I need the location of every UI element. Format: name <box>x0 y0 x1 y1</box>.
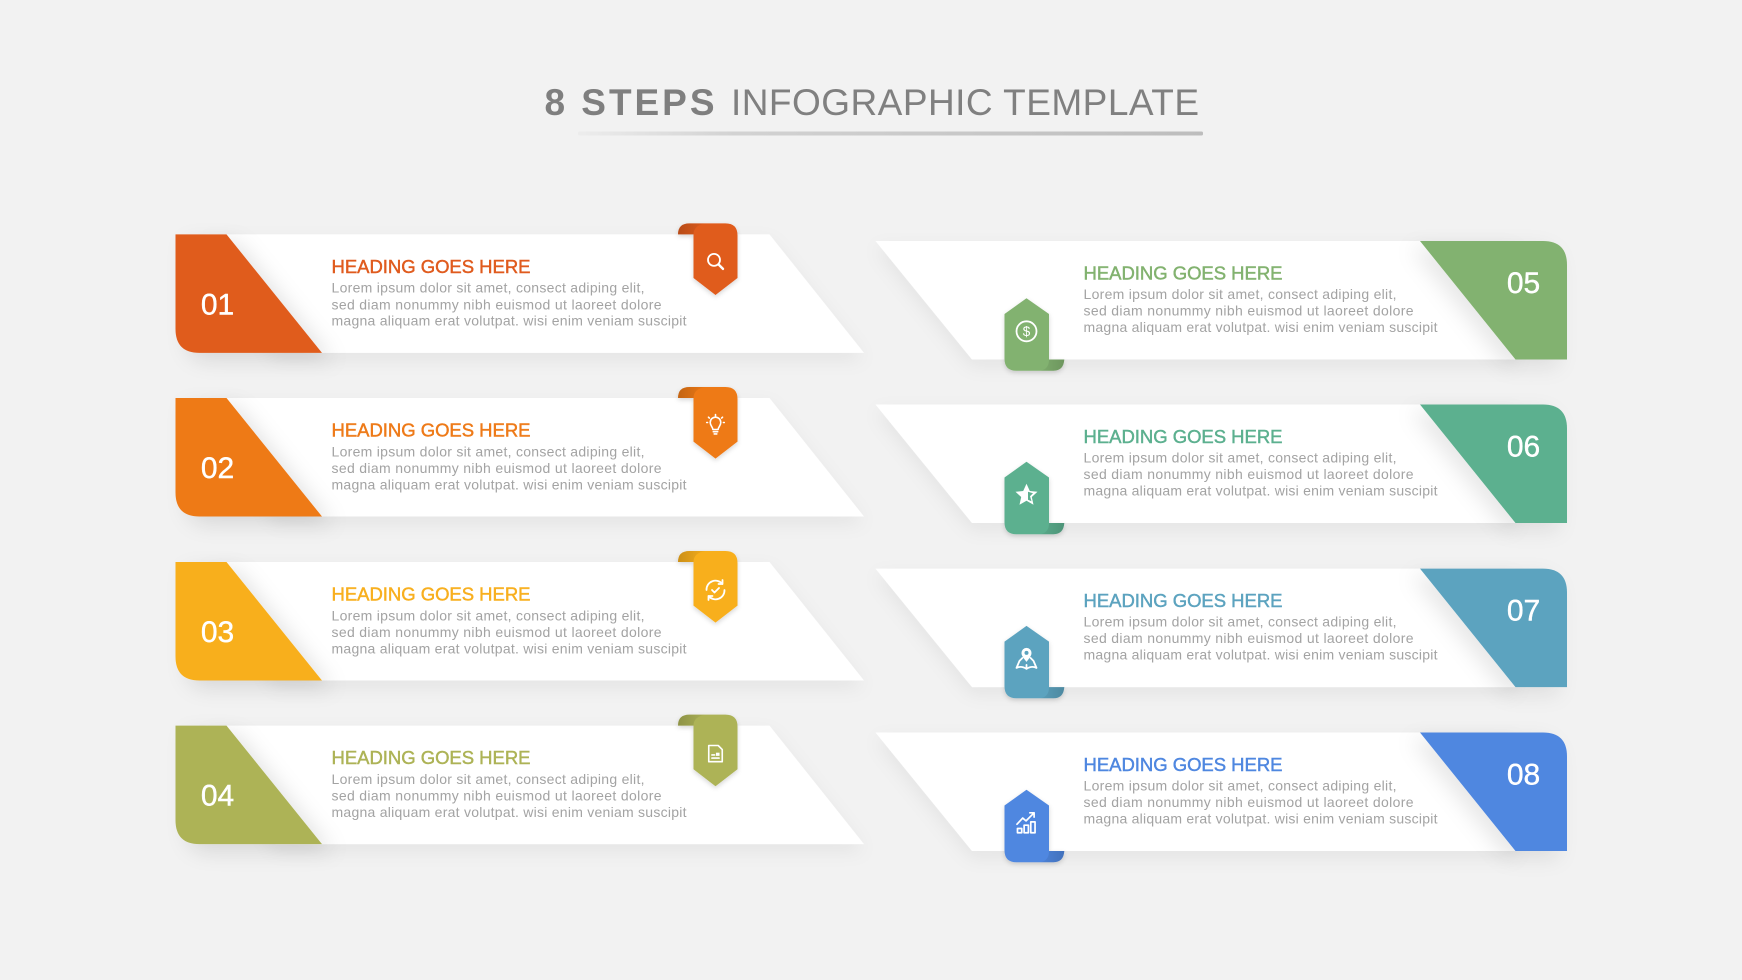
icon: dollar coin <box>1016 321 1036 341</box>
step 02 panel <box>176 387 864 516</box>
band <box>876 569 1516 687</box>
body text <box>332 443 687 492</box>
body text: sed diam nonummy nibh euismod ut laoreet dolore <box>1084 794 1414 810</box>
ribbon <box>1004 462 1064 534</box>
icon: refresh check <box>706 580 725 600</box>
icon: document <box>709 746 722 762</box>
icon: magnifier <box>708 254 723 269</box>
band <box>876 404 1516 523</box>
body text: magna aliquam erat volutpat. wisi enim veniam suscipit <box>1084 647 1438 663</box>
heading: HEADING GOES HERE <box>1084 262 1282 284</box>
band <box>876 241 1516 360</box>
body text: magna aliquam erat volutpat. wisi enim veniam suscipit <box>332 476 687 492</box>
body text: sed diam nonummy nibh euismod ut laoreet dolore <box>332 460 662 476</box>
number: 05 <box>1507 267 1540 300</box>
ribbon <box>678 387 738 459</box>
body text: magna aliquam erat volutpat. wisi enim veniam suscipit <box>1084 810 1438 826</box>
body text: Lorem ipsum dolor sit amet, consect adiping elit, <box>332 443 644 459</box>
heading: HEADING GOES HERE <box>332 256 530 277</box>
heading: HEADING GOES HERE <box>1084 590 1282 611</box>
number tab <box>176 562 322 680</box>
body text <box>1084 614 1438 663</box>
step 04 panel <box>176 715 864 844</box>
number: 02 <box>201 452 234 485</box>
body text <box>332 280 687 329</box>
step 01 panel <box>176 223 864 353</box>
number tab <box>176 234 322 353</box>
body text: Lorem ipsum dolor sit amet, consect adiping elit, <box>1084 286 1396 302</box>
number tab <box>176 398 322 516</box>
number: 03 <box>201 616 234 649</box>
title: 8 STEPS <box>544 82 714 123</box>
number: 08 <box>1507 758 1540 792</box>
body text: Lorem ipsum dolor sit amet, consect adiping elit, <box>1084 778 1396 794</box>
number: 07 <box>1507 595 1540 628</box>
body text: sed diam nonummy nibh euismod ut laoreet dolore <box>1084 302 1414 318</box>
number: 06 <box>1507 430 1540 464</box>
number tab <box>176 726 322 844</box>
body text: magna aliquam erat volutpat. wisi enim veniam suscipit <box>1084 319 1438 335</box>
body text: Lorem ipsum dolor sit amet, consect adiping elit, <box>1084 614 1396 630</box>
body text: sed diam nonummy nibh euismod ut laoreet dolore <box>332 624 662 640</box>
body text: Lorem ipsum dolor sit amet, consect adiping elit, <box>1084 450 1396 466</box>
ribbon <box>678 551 738 623</box>
step 08 panel <box>876 732 1567 862</box>
body text: magna aliquam erat volutpat. wisi enim veniam suscipit <box>332 804 687 820</box>
body text: sed diam nonummy nibh euismod ut laoreet dolore <box>332 788 662 804</box>
body text: sed diam nonummy nibh euismod ut laoreet dolore <box>332 296 662 312</box>
heading: HEADING GOES HERE <box>1084 754 1282 775</box>
title underline <box>578 132 1203 136</box>
heading: HEADING GOES HERE <box>1084 426 1282 447</box>
number tab <box>1420 569 1567 687</box>
body text: magna aliquam erat volutpat. wisi enim veniam suscipit <box>332 313 687 329</box>
ribbon <box>1004 790 1064 862</box>
band <box>206 562 864 680</box>
body text <box>1084 778 1438 826</box>
band <box>876 732 1516 851</box>
heading: HEADING GOES HERE <box>332 747 530 768</box>
number tab <box>1420 732 1567 851</box>
icon: dollar coin: $ <box>1023 324 1031 339</box>
body text <box>1084 286 1438 335</box>
body text: sed diam nonummy nibh euismod ut laoreet dolore <box>1084 466 1414 482</box>
body text <box>332 607 687 656</box>
number: 01 <box>201 288 234 321</box>
icon: star <box>1016 484 1038 505</box>
body text: magna aliquam erat volutpat. wisi enim veniam suscipit <box>332 640 687 656</box>
icon: map pin <box>1016 648 1036 669</box>
body text: Lorem ipsum dolor sit amet, consect adiping elit, <box>332 771 644 787</box>
band <box>206 398 864 516</box>
body text: magna aliquam erat volutpat. wisi enim veniam suscipit <box>1084 482 1438 498</box>
icon: light bulb <box>707 415 724 434</box>
band <box>206 234 864 353</box>
body text <box>332 771 687 820</box>
step 07 panel <box>876 569 1567 698</box>
heading: HEADING GOES HERE <box>332 584 530 604</box>
ribbon <box>678 223 738 295</box>
heading: HEADING GOES HERE <box>332 420 530 440</box>
ribbon <box>678 715 738 786</box>
body text: sed diam nonummy nibh euismod ut laoreet dolore <box>1084 630 1414 646</box>
body text: Lorem ipsum dolor sit amet, consect adiping elit, <box>332 280 644 296</box>
step 05 panel <box>876 241 1567 371</box>
ribbon <box>1004 298 1064 371</box>
body text: Lorem ipsum dolor sit amet, consect adiping elit, <box>332 607 644 623</box>
icon: growth chart <box>1017 813 1035 833</box>
title: INFOGRAPHIC TEMPLATE <box>731 82 1199 123</box>
number tab <box>1420 404 1567 523</box>
band <box>206 726 864 844</box>
number tab <box>1420 241 1567 360</box>
body text <box>1084 450 1438 498</box>
ribbon <box>1004 626 1064 698</box>
step 03 panel <box>176 551 864 680</box>
number: 04 <box>201 780 234 813</box>
step 06 panel <box>876 404 1567 534</box>
